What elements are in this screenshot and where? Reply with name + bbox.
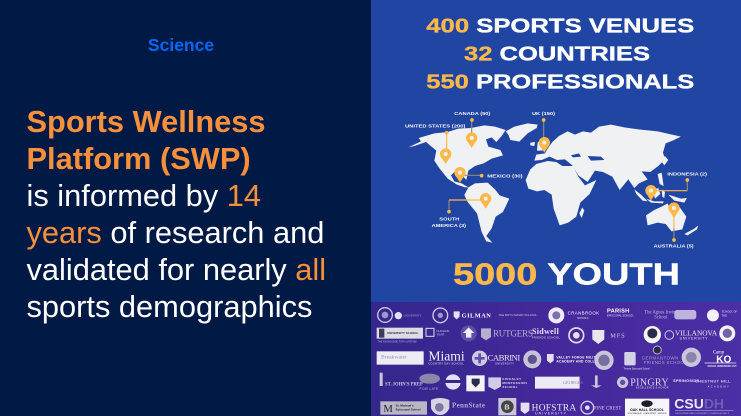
main statement text: Sports Wellness	[26, 104, 266, 139]
logos row 3	[377, 346, 737, 370]
map: continents	[408, 123, 698, 243]
logos row 3: COUNTRY DAY SCHOOL	[428, 362, 464, 366]
logos row 4: FOR LIFE	[419, 387, 439, 391]
logos row 1: School	[654, 316, 668, 321]
main statement text	[26, 104, 326, 324]
panel: partner logo wall	[371, 302, 741, 416]
headline statistics: 32 COUNTRIES	[464, 44, 650, 66]
logos row 4: KINGSLEY	[502, 377, 522, 381]
logos row 5: CALIFORNIA STATE UNIVERSITY, DOMINGUEZ HILLS	[675, 412, 730, 415]
logos row 1: UNIVERSITY	[404, 313, 422, 317]
logos row 5: Episcopal School	[396, 408, 421, 412]
main statement text: is informed by 14	[26, 178, 261, 213]
logos row 4: ST. JOHN'S PREP	[385, 382, 423, 387]
logos row 4: EXCELLENCE & HONOR	[636, 387, 669, 389]
logos row 3: Camp	[713, 350, 725, 355]
section label: Science: Science	[148, 35, 214, 55]
map: leader lines	[447, 120, 687, 240]
logos row 4: GEORGES	[563, 380, 584, 385]
logos row 5: PennState	[452, 402, 485, 410]
logos row 1: SCHOOL OF	[722, 310, 738, 314]
partner logos	[377, 307, 738, 416]
logos row 1: EPISCOPAL SCHOOL	[607, 313, 634, 317]
map: leader end dots	[445, 118, 689, 242]
logos row 5: M	[383, 404, 393, 415]
logos row 5: OAK HALL SCHOOL	[630, 408, 665, 412]
map: country labels: UK (150)	[532, 111, 556, 116]
logos row 5: St. Michael's	[396, 404, 414, 408]
logos row 5: PINE CREST	[594, 407, 621, 412]
logos row 3: Breakwater	[381, 354, 407, 360]
world map with venue pins	[405, 111, 708, 248]
logos row 3: KNOCK HOMEWORK OUT	[708, 366, 737, 368]
logos row 2: Sidwell	[532, 327, 560, 336]
logos row 3: UNIVERSITY	[495, 362, 514, 366]
logos row 1: THE BRYN MAWR SCHOOL	[498, 313, 537, 317]
logos row 3: ACADEMY AND COLLEGE	[556, 360, 603, 364]
map: country labels: MEXICO (30)	[487, 173, 523, 178]
logos row 3: CABRINI	[488, 353, 520, 363]
logos row 2: RUTGERS	[493, 329, 533, 339]
logos row 2	[377, 325, 735, 344]
logos row 4: MONTESSORI	[502, 381, 527, 385]
logos row 4: PINGRY	[630, 377, 669, 388]
logos row 1: The Agnes Irwin	[644, 310, 676, 315]
panel: left navy background	[0, 0, 371, 416]
logos row 3: GERMANTOWN	[642, 356, 679, 361]
logos row 5	[380, 396, 734, 416]
logos row 5: CSUDH	[674, 396, 724, 412]
logos row 2: MFS	[610, 332, 625, 339]
logos row 1	[378, 307, 738, 323]
logos row 5: UNIVERSITY	[535, 411, 567, 415]
logos row 4: SCHOOL	[502, 385, 518, 389]
main statement text: years of research and	[26, 215, 324, 250]
logos row 1: GILMAN	[462, 312, 491, 319]
map: country labels: CANADA (50)	[454, 111, 491, 116]
headline statistics	[426, 16, 694, 94]
logos row 1: PARISH	[607, 309, 630, 315]
map: country labels: INDONESIA (2)	[667, 172, 708, 177]
logos row 3: Miami	[428, 349, 465, 364]
logos row 3: FRIENDS SCHOOL	[644, 360, 687, 365]
logos row 3: Temple Episcopal School	[624, 368, 650, 370]
logos row 1: CRANBROOK	[568, 311, 599, 316]
panel: right blue background	[371, 0, 741, 302]
map: country labels: AMERICA (3)	[432, 223, 467, 228]
logos row 5: HOFSTRA	[532, 404, 576, 414]
logos row 2: VILLANOVA	[675, 328, 718, 337]
logos row 3: VALLEY FORGE MILITARY	[556, 355, 604, 359]
logos row 2: UNIVERSITY	[680, 337, 708, 341]
map: country labels: AUSTRALIA (5)	[654, 243, 694, 248]
logos row 5: B	[504, 402, 510, 411]
logos row 3: KO	[716, 355, 732, 366]
logos row 5: SCHOLARSHIP · LEADERSHIP · SERVICE	[628, 412, 667, 415]
logos row 2: YEAR	[436, 333, 445, 337]
logos row 2: UNIVERSITY SCHOOL	[387, 331, 419, 335]
logos row 4: CHESTNUT HILL	[695, 379, 731, 384]
logos row 4: ACADEMY	[708, 385, 730, 389]
logos row 2: DURHAM	[436, 329, 450, 333]
logos row 1: THE	[722, 314, 727, 318]
headline statistics: 400 SPORTS VENUES	[426, 16, 694, 38]
map: country labels: SOUTH	[439, 217, 460, 222]
logos row 1: SCHOOLS	[577, 318, 589, 320]
headline statistics: 550 PROFESSIONALS	[426, 72, 694, 94]
logos row 4	[380, 373, 731, 391]
map: country labels	[405, 111, 708, 248]
youth statistic: 5000 YOUTH	[453, 258, 680, 292]
map: location pins	[440, 132, 680, 218]
map: country labels: UNITED STATES (200)	[405, 124, 466, 129]
logos row 4: SPRINGSIDE	[673, 378, 699, 383]
main statement text: sports demographics	[26, 289, 312, 324]
logos row 2: THE KNOWLEDGE FOR A LIFETIME	[378, 341, 417, 344]
logos row 2: FRIENDS SCHOOL	[532, 336, 560, 340]
main statement text: validated for nearly all	[26, 252, 326, 287]
main statement text: Platform (SWP)	[26, 141, 251, 176]
